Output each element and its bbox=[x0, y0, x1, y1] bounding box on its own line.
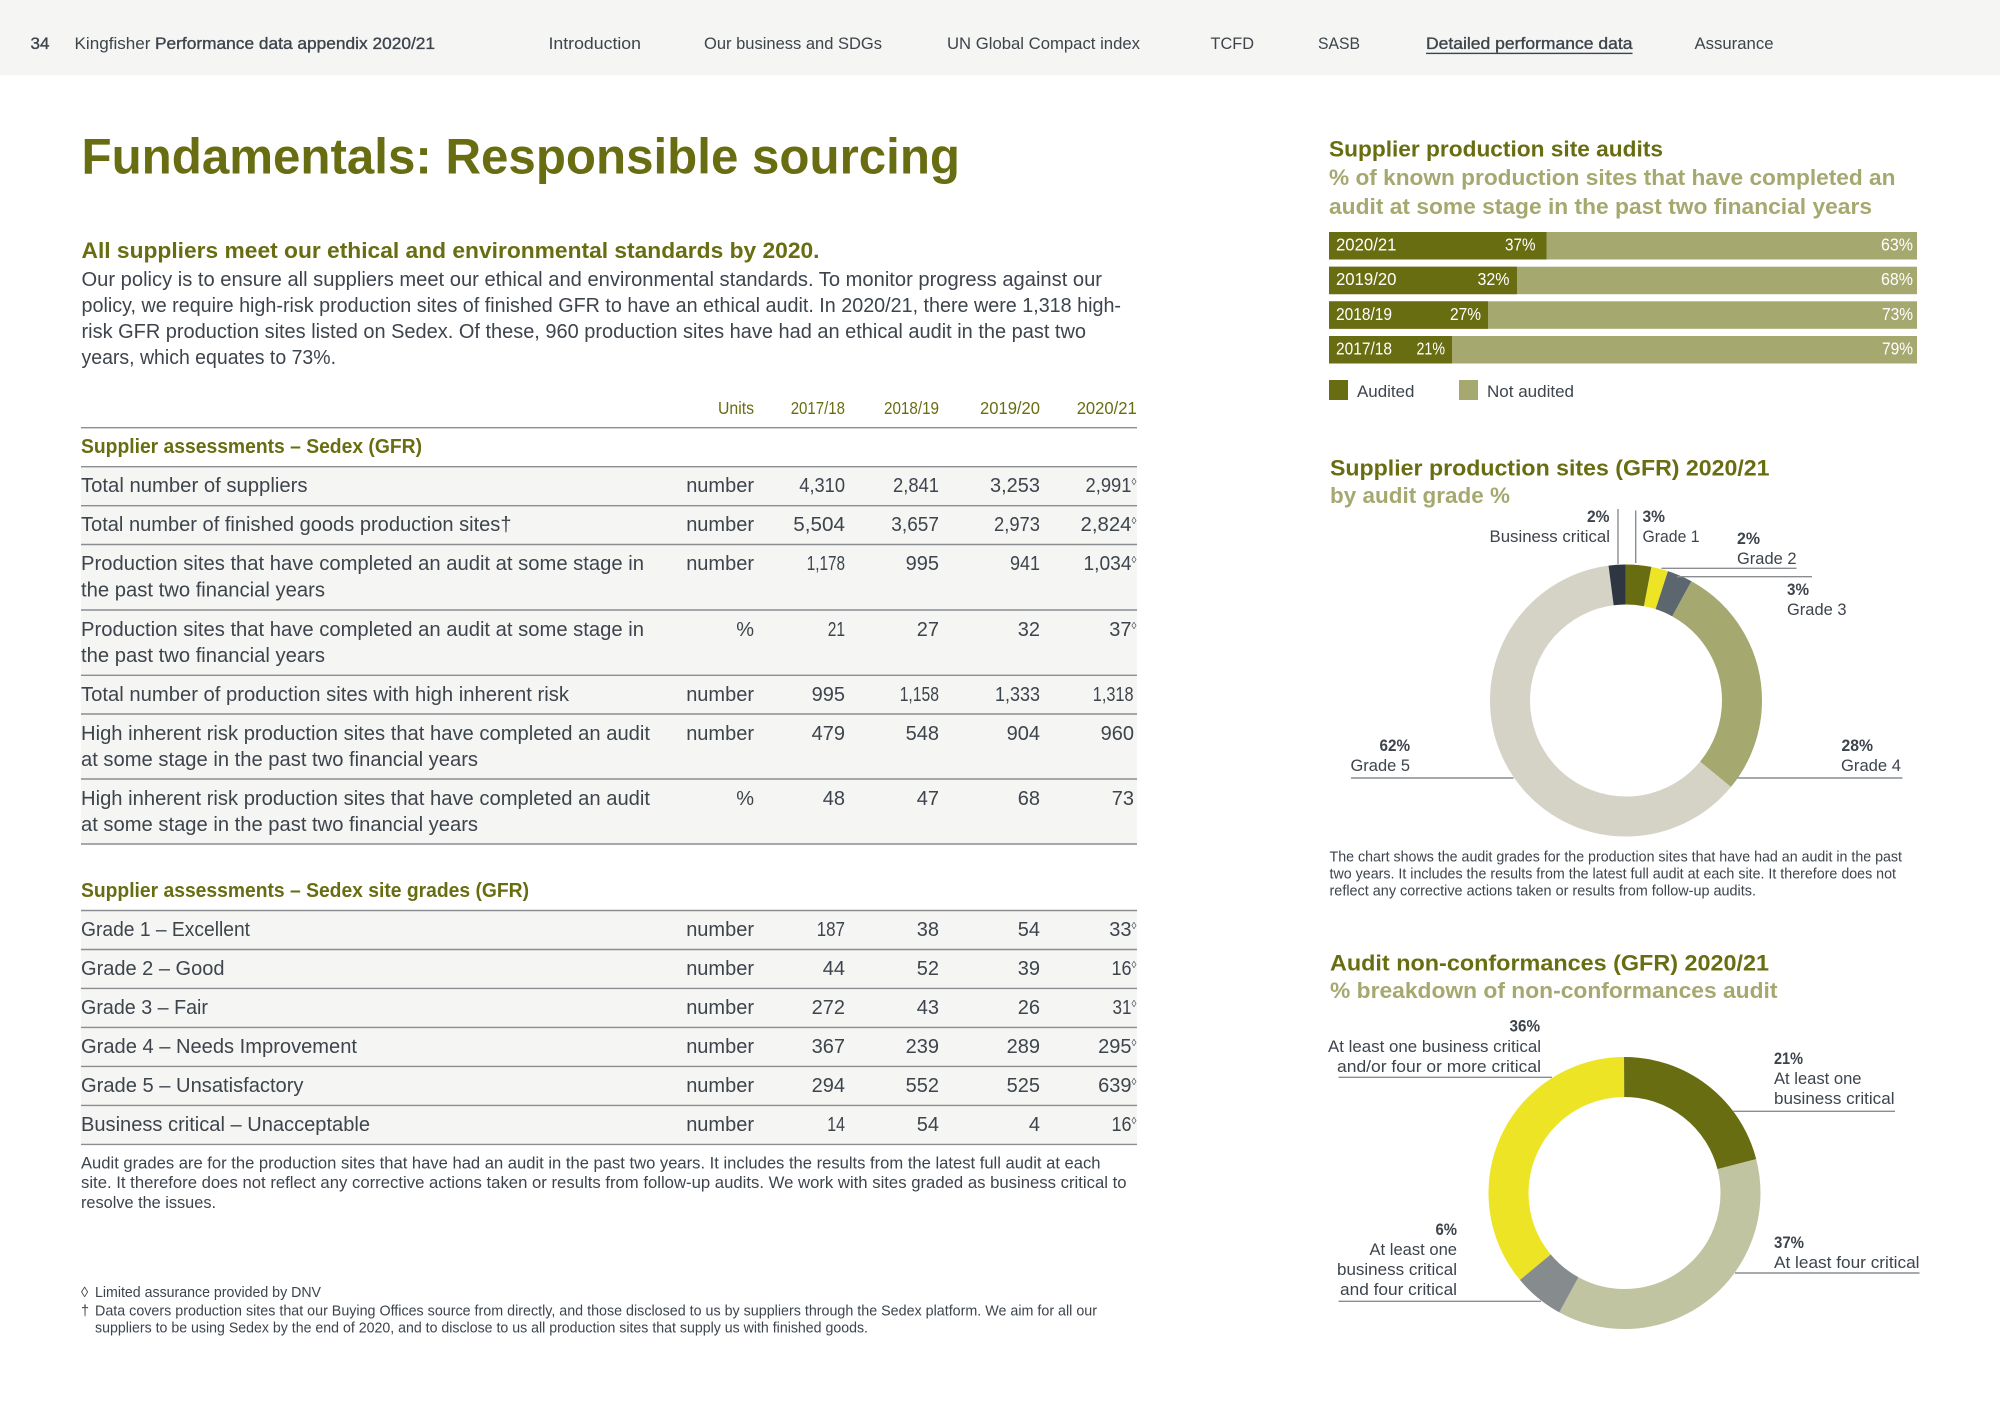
heading: supplier production sites: by audit grade % bbox=[1330, 483, 1510, 508]
row: grade 1 bbox=[81, 919, 1136, 941]
section heading: site grades: Supplier assessments – Sedex site grades (GFR) bbox=[81, 880, 529, 902]
row: finished goods sites: 2,973 bbox=[994, 514, 1040, 536]
row: high inherent risk: 1,318 bbox=[1093, 684, 1134, 706]
legend: audited bbox=[1329, 380, 1414, 401]
nav: SASB: SASB bbox=[1318, 34, 1360, 53]
table column headers: 2017/18 bbox=[791, 398, 845, 418]
callout: at least four critical bbox=[1735, 1233, 1920, 1273]
table column headers: Units bbox=[718, 398, 754, 418]
row: high inherent risk: 1,333 bbox=[995, 684, 1040, 706]
footnotes bbox=[81, 1285, 1097, 1336]
heading: supplier production sites bbox=[1330, 456, 1770, 508]
row: sites audited percent bbox=[81, 619, 1136, 667]
row: high risk audited percent: High inherent risk production sites that have completed an audit bbox=[81, 788, 650, 810]
footnotes: Data covers production sites that our Buying Offices source from directly, and those disclosed to us by suppliers through the Sedex platform. We aim for all our bbox=[95, 1304, 1097, 1320]
donut chart: non-conformances bbox=[1508, 1077, 1740, 1309]
row: grade 5: Grade 5 – Unsatisfactory bbox=[81, 1075, 304, 1097]
row: finished goods sites: number bbox=[686, 514, 754, 536]
callout: at least one business critical bbox=[1733, 1049, 1895, 1111]
donut chart: audit grades bbox=[1510, 584, 1742, 816]
row: grade 1: ◊ bbox=[1132, 921, 1136, 932]
row: grade 1: number bbox=[686, 919, 754, 941]
footnotes: Limited assurance provided by DNV bbox=[95, 1285, 321, 1301]
callout: at least one business critical and four critical: At least one bbox=[1370, 1240, 1457, 1259]
row: finished goods sites: 5,504 bbox=[793, 514, 845, 536]
row: grade 4 bbox=[81, 1036, 1136, 1058]
row: sites audited number: 1,034 bbox=[1084, 553, 1132, 575]
row: grade 2: 39 bbox=[1018, 958, 1040, 980]
row: grade 5: number bbox=[686, 1075, 754, 1097]
nav: TCFD: TCFD bbox=[1210, 34, 1254, 53]
row: grade 3 bbox=[81, 997, 1136, 1019]
row: high risk audited percent: at some stage in the past two financial years bbox=[81, 814, 478, 836]
row: business critical: Business critical – Unacceptable bbox=[81, 1114, 370, 1136]
callout: grade 4: Grade 4 bbox=[1841, 756, 1901, 775]
callout: grade 1: Grade 1 bbox=[1642, 527, 1700, 546]
row: sites audited number bbox=[81, 553, 1136, 602]
row: grade 1: Grade 1 – Excellent bbox=[81, 919, 250, 941]
intro paragraph: risk GFR production sites listed on Sedex. Of these, 960 production sites have had an ethical audit in the past two bbox=[82, 321, 1086, 343]
row: sites audited number: Production sites that have completed an audit at some stage in bbox=[81, 553, 644, 575]
row: grade 5 bbox=[81, 1075, 1136, 1097]
row: sites audited percent: 37 bbox=[1109, 619, 1132, 641]
callout: grade 2 bbox=[1662, 529, 1796, 568]
callout: at least one business critical and/or four: 36% bbox=[1510, 1016, 1540, 1036]
bar: 2020/21: 37% bbox=[1505, 234, 1536, 254]
row: finished goods sites: ◊ bbox=[1132, 516, 1136, 527]
row: grade 4: 367 bbox=[812, 1036, 845, 1058]
nav: introduction: Introduction bbox=[548, 34, 641, 53]
row: finished goods sites: 2,824 bbox=[1080, 514, 1132, 536]
row: total suppliers: 4,310 bbox=[799, 475, 845, 497]
heading: supplier production site audits bbox=[1329, 136, 1896, 219]
chart note: reflect any corrective actions taken or results from follow-up audits. bbox=[1330, 882, 1756, 900]
intro paragraph: Our policy is to ensure all suppliers meet our ethical and environmental standards. To monitor progress against our bbox=[82, 269, 1102, 291]
callout: at least one business critical and four critical bbox=[1337, 1220, 1541, 1301]
table column headers: 2018/19 bbox=[884, 398, 939, 418]
header navigation bar bbox=[0, 0, 2000, 75]
nav: UN global compact: UN Global Compact index bbox=[947, 34, 1140, 53]
table column headers: 2019/20 bbox=[980, 398, 1040, 418]
row: grade 2: Grade 2 – Good bbox=[81, 958, 224, 980]
callout: grade 3: Grade 3 bbox=[1787, 600, 1846, 619]
row: sites audited percent: Production sites that have completed an audit at some stage in bbox=[81, 619, 644, 641]
row: sites audited percent: 32 bbox=[1018, 619, 1040, 641]
row: high risk audited percent: 68 bbox=[1018, 788, 1040, 810]
row: finished goods sites: 3,657 bbox=[891, 514, 939, 536]
row: grade 4: ◊ bbox=[1132, 1038, 1136, 1049]
row: grade 1: 38 bbox=[917, 919, 939, 941]
chart note: two years. It includes the results from the latest full audit at each site. It therefore does not bbox=[1330, 866, 1897, 882]
bar: 2019/20: 32% bbox=[1478, 269, 1510, 289]
row: high inherent risk: number bbox=[686, 684, 754, 706]
row: total suppliers: ◊ bbox=[1132, 477, 1136, 488]
table note bbox=[81, 1154, 1126, 1212]
callout: at least one business critical: 21% bbox=[1774, 1049, 1803, 1068]
legend: not audited: Not audited bbox=[1487, 382, 1574, 401]
bar: 2018/19 bbox=[1329, 301, 1917, 329]
row: grade 3: 26 bbox=[1018, 997, 1040, 1019]
row: grade 5: 294 bbox=[812, 1075, 845, 1097]
row: business critical: 54 bbox=[917, 1114, 939, 1136]
row: grade 3: 31 bbox=[1112, 997, 1132, 1019]
row: high inherent risk bbox=[81, 684, 1134, 706]
row: grade 4: number bbox=[686, 1036, 754, 1058]
callout: at least one business critical and/or four bbox=[1328, 1016, 1552, 1077]
callout: at least one business critical: business critical bbox=[1774, 1089, 1894, 1108]
row: total suppliers: Total number of suppliers bbox=[81, 475, 308, 497]
row: high risk audited percent: 47 bbox=[917, 788, 939, 810]
row: grade 4: 295 bbox=[1098, 1036, 1132, 1058]
row: grade 2 bbox=[81, 958, 1136, 980]
bar: 2017/18 bbox=[1329, 336, 1917, 364]
intro subheading: All suppliers meet our ethical and environmental standards by 2020. bbox=[82, 238, 819, 263]
row: business critical: number bbox=[686, 1114, 754, 1136]
row: finished goods sites bbox=[81, 514, 1136, 536]
row: grade 3: ◊ bbox=[1132, 999, 1136, 1010]
row: grade 2: number bbox=[686, 958, 754, 980]
bar: 2017/18: 21% bbox=[1416, 338, 1445, 358]
row: total suppliers bbox=[81, 475, 1136, 497]
callout: grade 3 bbox=[1677, 577, 1846, 619]
table note: Audit grades are for the production sites that have had an audit in the past two years. It includes the results from the latest full audit at each bbox=[81, 1154, 1100, 1172]
row: grade 4: 289 bbox=[1007, 1036, 1040, 1058]
heading: audit non-conformances: Audit non-conformances (GFR) 2020/21 bbox=[1330, 950, 1769, 976]
intro paragraph bbox=[82, 269, 1121, 369]
row: high risk audited number: 548 bbox=[906, 723, 939, 745]
bar: 2019/20 bbox=[1329, 267, 1917, 294]
row: total suppliers: 2,991 bbox=[1086, 475, 1132, 497]
bar: 2019/20: 68% bbox=[1881, 269, 1913, 289]
callout: grade 2: 2% bbox=[1737, 529, 1760, 548]
heading: supplier production site audits: audit at some stage in the past two financial years bbox=[1329, 194, 1872, 219]
callout: business critical: Business critical bbox=[1490, 527, 1610, 546]
bar: 2018/19: 73% bbox=[1882, 304, 1913, 324]
callout: at least four critical: At least four critical bbox=[1774, 1253, 1920, 1272]
row: high risk audited percent bbox=[81, 788, 1134, 836]
row: sites audited percent: 21 bbox=[828, 619, 845, 641]
heading: audit non-conformances: % breakdown of non-conformances audit bbox=[1330, 978, 1778, 1003]
row: sites audited percent: ◊ bbox=[1132, 621, 1136, 632]
row: sites audited percent: % bbox=[736, 619, 754, 641]
bar: 2018/19: 27% bbox=[1450, 304, 1481, 324]
row: sites audited number: 1,178 bbox=[807, 553, 845, 575]
row: high inherent risk: Total number of production sites with high inherent risk bbox=[81, 684, 570, 706]
row: grade 4: Grade 4 – Needs Improvement bbox=[81, 1036, 357, 1058]
callout: grade 1: 3% bbox=[1642, 507, 1665, 526]
table note: resolve the issues. bbox=[81, 1193, 216, 1212]
bar: 2017/18: 2017/18 bbox=[1336, 338, 1392, 358]
row: finished goods sites: Total number of finished goods production sites† bbox=[81, 514, 512, 536]
row: high risk audited number: number bbox=[686, 723, 754, 745]
callout: grade 2: Grade 2 bbox=[1737, 549, 1796, 568]
callout: grade 4: 28% bbox=[1842, 736, 1873, 755]
row: sites audited number: 941 bbox=[1010, 553, 1040, 575]
row: grade 1: 187 bbox=[817, 919, 845, 941]
row: high risk audited percent: % bbox=[736, 788, 754, 810]
legend: audited: Audited bbox=[1357, 382, 1414, 401]
table note: site. It therefore does not reflect any corrective actions taken or results from follow-up audits. We work with sites graded as business critical to bbox=[81, 1173, 1126, 1192]
callout: grade 3: 3% bbox=[1787, 580, 1809, 599]
bar: 2020/21 bbox=[1329, 232, 1917, 260]
row: grade 5: 639 bbox=[1098, 1075, 1132, 1097]
callout: grade 5: 62% bbox=[1380, 736, 1410, 755]
intro paragraph: policy, we require high-risk production sites of finished GFR to have an ethical audit. In 2020/21, there were 1,318 high- bbox=[82, 295, 1121, 317]
nav: assurance: Assurance bbox=[1694, 34, 1774, 53]
row: total suppliers: number bbox=[686, 475, 754, 497]
heading: audit non-conformances bbox=[1330, 950, 1778, 1003]
row: high inherent risk: 1,158 bbox=[900, 684, 939, 706]
row: high risk audited number: 960 bbox=[1101, 723, 1134, 745]
bar: 2020/21: 2020/21 bbox=[1336, 234, 1396, 254]
stacked bar chart: site audits bbox=[1329, 232, 1917, 364]
callout: at least one business critical and four critical: business critical bbox=[1337, 1260, 1457, 1279]
row: business critical: 14 bbox=[827, 1114, 845, 1136]
report name: Kingfisher bbox=[74, 34, 151, 53]
row: sites audited number: the past two financial years bbox=[81, 580, 325, 602]
row: grade 3: 272 bbox=[812, 997, 845, 1019]
footnotes: † bbox=[81, 1304, 89, 1320]
row: grade 2: 16 bbox=[1112, 958, 1132, 980]
callout: business critical bbox=[1490, 507, 1618, 564]
heading: supplier production site audits: Supplier production site audits bbox=[1329, 136, 1663, 162]
row: sites audited number: ◊ bbox=[1132, 555, 1136, 566]
row: high risk audited number bbox=[81, 723, 1134, 771]
callout: at least one business critical and four critical: 6% bbox=[1436, 1220, 1457, 1239]
row: grade 1: 33 bbox=[1109, 919, 1132, 941]
row: high risk audited number: High inherent risk production sites that have completed an audit bbox=[81, 723, 650, 745]
heading: supplier production sites: Supplier production sites (GFR) 2020/21 bbox=[1330, 456, 1770, 480]
row: grade 4: 239 bbox=[906, 1036, 939, 1058]
chart note: The chart shows the audit grades for the production sites that have had an audit in the past bbox=[1330, 848, 1903, 866]
row: grade 3: 43 bbox=[917, 997, 939, 1019]
row: high risk audited percent: 48 bbox=[823, 788, 845, 810]
heading: supplier production site audits: % of known production sites that have completed an bbox=[1329, 165, 1896, 190]
callout: grade 4 bbox=[1738, 736, 1902, 778]
intro paragraph: years, which equates to 73%. bbox=[82, 347, 336, 369]
row: grade 2: 52 bbox=[917, 958, 939, 980]
chart note bbox=[1330, 848, 1903, 900]
row: high risk audited number: 904 bbox=[1007, 723, 1040, 745]
bar: 2017/18: 79% bbox=[1882, 338, 1913, 358]
table: supplier assessments bbox=[81, 398, 1137, 1144]
row: grade 5: 552 bbox=[906, 1075, 939, 1097]
callout: at least four critical: 37% bbox=[1774, 1233, 1804, 1252]
bar: 2020/21: 63% bbox=[1881, 234, 1913, 254]
row: sites audited number: number bbox=[686, 553, 754, 575]
report title: Performance data appendix 2020/21 bbox=[155, 34, 435, 53]
row: high risk audited percent: 73 bbox=[1112, 788, 1134, 810]
row: grade 5: ◊ bbox=[1132, 1077, 1136, 1088]
row: grade 3: number bbox=[686, 997, 754, 1019]
row: grade 3: Grade 3 – Fair bbox=[81, 997, 208, 1019]
legend: not audited bbox=[1459, 380, 1574, 401]
page number: 34 bbox=[30, 34, 50, 53]
row: total suppliers: 2,841 bbox=[893, 475, 939, 497]
row: grade 2: 44 bbox=[823, 958, 845, 980]
row: sites audited number: 995 bbox=[906, 553, 939, 575]
callout: grade 5 bbox=[1350, 736, 1514, 778]
section heading: Sedex GFR: Supplier assessments – Sedex (GFR) bbox=[81, 436, 422, 458]
row: high inherent risk: 995 bbox=[812, 684, 845, 706]
table column headers: 2020/21 bbox=[1077, 398, 1137, 418]
footnotes: ◊ bbox=[81, 1285, 89, 1301]
row: business critical: 16 bbox=[1112, 1114, 1132, 1136]
row: sites audited percent: the past two financial years bbox=[81, 645, 325, 667]
bar: 2018/19: 2018/19 bbox=[1336, 304, 1392, 324]
row: grade 2: ◊ bbox=[1132, 960, 1136, 971]
table column headers bbox=[718, 398, 1137, 418]
footnotes: suppliers to be using Sedex by the end of 2020, and to disclose to us all production sites that supply us with finished goods. bbox=[95, 1320, 868, 1336]
callout: at least one business critical and/or four: At least one business critical bbox=[1328, 1037, 1541, 1056]
row: high risk audited number: at some stage in the past two financial years bbox=[81, 749, 478, 771]
row: business critical: 4 bbox=[1029, 1114, 1040, 1136]
title: Fundamentals: Responsible sourcing bbox=[82, 128, 960, 184]
row: high risk audited number: 479 bbox=[812, 723, 845, 745]
row: total suppliers: 3,253 bbox=[990, 475, 1040, 497]
row: grade 5: 525 bbox=[1007, 1075, 1040, 1097]
bar: 2019/20: 2019/20 bbox=[1336, 269, 1397, 289]
callout: business critical: 2% bbox=[1587, 507, 1610, 526]
nav: detailed performance data (active): Detailed performance data bbox=[1426, 34, 1633, 53]
callout: grade 5: Grade 5 bbox=[1350, 756, 1410, 775]
row: business critical: ◊ bbox=[1132, 1116, 1136, 1127]
callout: at least one business critical and four critical: and four critical bbox=[1340, 1280, 1457, 1299]
row: business critical bbox=[81, 1114, 1136, 1136]
callout: at least one business critical: At least one bbox=[1774, 1069, 1862, 1088]
row: sites audited percent: 27 bbox=[917, 619, 939, 641]
callout: grade 1 bbox=[1636, 507, 1700, 563]
row: grade 1: 54 bbox=[1018, 919, 1040, 941]
nav: our business: Our business and SDGs bbox=[704, 34, 882, 53]
callout: at least one business critical and/or four: and/or four or more critical bbox=[1337, 1057, 1541, 1076]
